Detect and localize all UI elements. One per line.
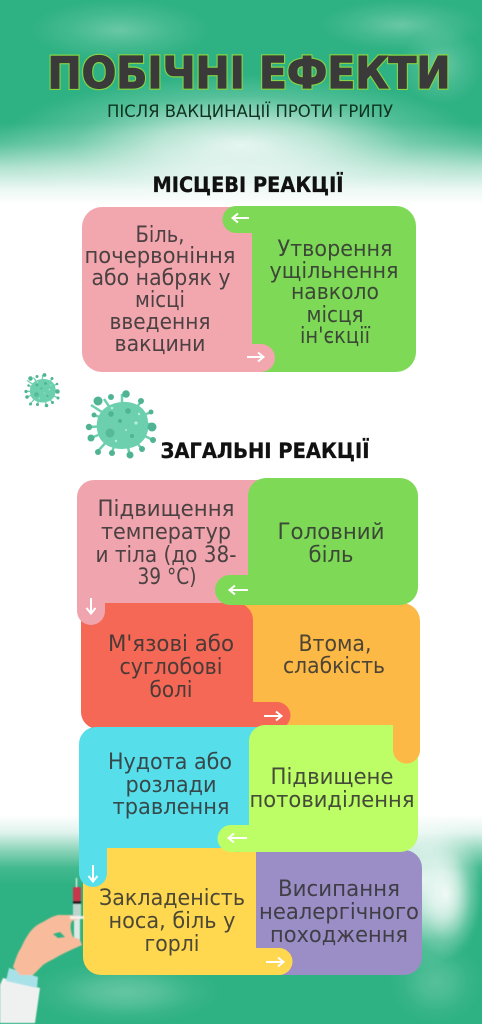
text: induration: ущільнення: [270, 259, 398, 284]
text: nausea: Нудота або: [108, 750, 232, 775]
text: induration: місця: [306, 303, 364, 328]
hand: [13, 915, 83, 975]
syringe: [73, 878, 81, 940]
card: cyan nausea: [79, 727, 260, 887]
text: fatigue: Втома,: [298, 632, 372, 657]
text: temperature: Підвищення: [98, 497, 234, 522]
text: induration: ін'єкції: [300, 324, 371, 349]
text: pain and redness: місці: [135, 288, 185, 313]
text: sweating: потовиділення: [250, 788, 414, 813]
text: muscle pain: суглобові: [120, 655, 222, 680]
text: nausea: травлення: [112, 795, 230, 820]
text: muscle pain: [108, 632, 234, 703]
subtitle: ПІСЛЯ ВАКЦИНАЦІЇ ПРОТИ ГРИПУ: [107, 101, 394, 122]
arrow: cyan down: [88, 865, 98, 882]
text: congestion: горлі: [144, 932, 200, 957]
text: induration: Утворення: [278, 237, 392, 262]
text: pain and redness: [84, 223, 236, 357]
card: lime sweating: [218, 725, 418, 852]
panel: general reactions: [77, 478, 422, 975]
text: pain and redness: або набряк у: [92, 266, 230, 291]
card: orange fatigue: [240, 603, 420, 764]
cuff: [6, 968, 38, 988]
arrow: red right: [264, 712, 282, 720]
text: muscle pain: М'язові або: [108, 632, 234, 657]
syringe flange: [70, 916, 84, 919]
card: green headache: [215, 478, 418, 605]
text: rash: [259, 877, 419, 948]
text: pain and redness: введення: [110, 310, 210, 335]
text: headache: [278, 520, 384, 568]
text: congestion: Закладеність: [99, 886, 245, 911]
card: pain and redness: [82, 207, 272, 372]
text: induration: навколо: [291, 280, 379, 305]
arrow: yellow right: [266, 958, 284, 966]
text: sweating: Підвищене: [270, 765, 394, 790]
text: nausea: розлади: [126, 773, 216, 798]
tab: pink arrow tab: [252, 344, 275, 372]
text: pain and redness: вакцини: [114, 332, 206, 357]
text: sweating: [250, 765, 414, 813]
text: rash: неалергічного: [259, 900, 419, 925]
icon: large virus: [86, 390, 156, 458]
text: temperature: [96, 497, 236, 590]
text: headache: біль: [308, 543, 354, 568]
text: muscle pain: болі: [150, 678, 192, 703]
text: rash: походження: [270, 923, 408, 948]
arrow: left: [232, 214, 249, 222]
panel: local reactions: [82, 206, 416, 372]
card: induration: [222, 206, 416, 372]
text: fatigue: слабкість: [283, 654, 385, 679]
arrow: green left: [230, 586, 248, 594]
card: yellow congestion: [83, 848, 292, 975]
text: temperature: 39 °C): [138, 565, 196, 590]
icon: hand holding syringe: [0, 878, 84, 1023]
text: pain and redness: почервоніння: [84, 244, 236, 269]
text: rash: Висипання: [278, 877, 400, 902]
text: congestion: носа, біль у: [108, 909, 236, 934]
text: pain and redness: Біль,: [136, 223, 184, 248]
tab: orange over lime: [393, 720, 420, 764]
arrow: lime left: [228, 834, 247, 842]
text: headache: Головний: [278, 520, 384, 545]
arrow: pink down: [86, 598, 96, 614]
title: ПОБІЧНІ ЕФЕКТИ: [48, 48, 450, 99]
text: congestion: [99, 886, 245, 957]
text: temperature: температур: [101, 520, 231, 545]
heading: local reactions: МІСЦЕВІ РЕАКЦІЇ: [152, 172, 344, 197]
arrow: right: [247, 352, 264, 362]
icon: small virus: [24, 373, 60, 407]
tab: yellow arrow tab: [250, 948, 292, 975]
text: induration: [270, 237, 398, 349]
card: pink temperature: [77, 480, 262, 625]
text: nausea: [108, 750, 232, 820]
text: fatigue: [283, 632, 385, 679]
text: temperature: и тіла (до 38-: [96, 543, 236, 568]
heading: general reactions: ЗАГАЛЬНІ РЕАКЦІЇ: [160, 438, 370, 463]
card: purple rash: [256, 850, 422, 975]
title: ПОБІЧНІ ЕФЕКТИ: [48, 48, 450, 99]
card: red muscle pain: [81, 603, 253, 729]
tab: red arrow tab: [240, 702, 290, 729]
sleeve: [0, 978, 40, 1023]
